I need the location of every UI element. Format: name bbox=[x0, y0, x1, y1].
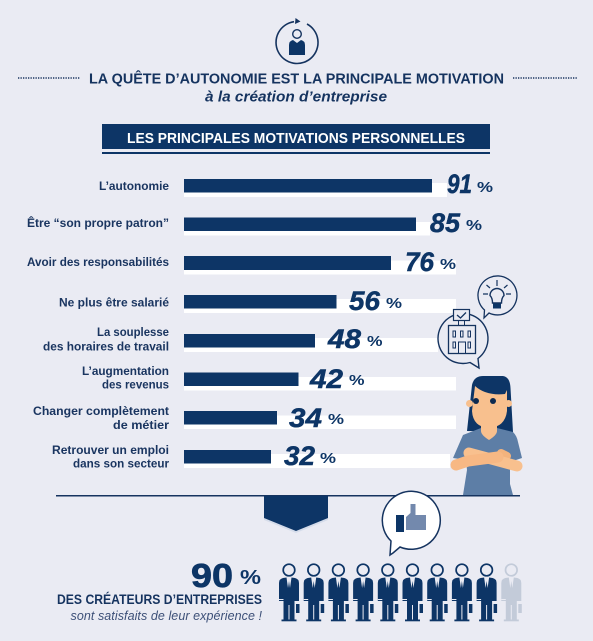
row: secteur bbox=[52, 441, 450, 471]
heading banner bbox=[102, 124, 490, 154]
row: salarie: 56 bbox=[349, 286, 380, 316]
row: metier: de métier bbox=[113, 420, 170, 432]
row: salarie bbox=[59, 286, 456, 316]
row: revenus: des revenus bbox=[102, 380, 169, 392]
title: à la création d’entreprise bbox=[205, 90, 387, 106]
row: revenus: 42 bbox=[309, 364, 343, 394]
row: metier bbox=[33, 403, 456, 433]
row: responsabilites: Avoir des responsabilités bbox=[27, 257, 169, 269]
icon: person in a circular arrow bbox=[276, 18, 318, 63]
heading banner: LES PRINCIPALES MOTIVATIONS PERSONNELLES bbox=[127, 131, 465, 147]
row: patron: Être “son propre patron” bbox=[27, 217, 169, 230]
title: LA QUÊTE D’AUTONOMIE EST LA PRINCIPALE MOTIVATION bbox=[89, 70, 504, 88]
row: metier: Changer complètement bbox=[33, 406, 169, 418]
row: souplesse bbox=[43, 324, 438, 354]
icon: building speech bubble bbox=[438, 310, 488, 368]
statistic: 90 %: DES CRÉATEURS D’ENTREPRISES bbox=[57, 592, 262, 607]
row: patron bbox=[27, 208, 482, 238]
row: salarie: Ne plus être salarié bbox=[59, 298, 169, 310]
icon: thumbs-up speech bubble bbox=[382, 491, 440, 555]
pictogram row: ten business people bbox=[279, 564, 522, 621]
statistic: 90 %: sont satisfaits de leur expérience ! bbox=[70, 609, 263, 623]
illustration: woman with crossed arms bbox=[453, 376, 522, 495]
icon: light bulb speech bubble bbox=[478, 276, 517, 318]
row: autonomie: 91 bbox=[447, 169, 472, 199]
row: metier: 34 bbox=[289, 403, 322, 433]
row: souplesse: La souplesse bbox=[97, 327, 169, 339]
row: salarie: % bbox=[386, 295, 402, 312]
row: responsabilites bbox=[27, 247, 456, 277]
row: autonomie: % bbox=[477, 179, 493, 196]
statistic: 90 % bbox=[57, 557, 263, 623]
row: autonomie bbox=[99, 169, 493, 199]
row: secteur: % bbox=[320, 450, 336, 467]
row: responsabilites: % bbox=[440, 256, 456, 273]
row: patron: 85 bbox=[430, 208, 461, 238]
row: secteur: 32 bbox=[284, 441, 315, 471]
row: responsabilites: 76 bbox=[405, 247, 434, 277]
row: patron: % bbox=[466, 217, 482, 234]
title bbox=[89, 70, 504, 106]
row: secteur: Retrouver un emploi bbox=[52, 445, 169, 457]
row: revenus: L’augmentation bbox=[82, 366, 169, 378]
row: revenus: % bbox=[349, 372, 364, 389]
row: revenus bbox=[82, 364, 456, 394]
bar chart bbox=[27, 169, 493, 471]
row: autonomie: L’autonomie bbox=[99, 181, 169, 193]
divider with arrow tab bbox=[56, 495, 520, 533]
row: souplesse: 48 bbox=[327, 324, 361, 354]
row: metier: % bbox=[328, 411, 344, 428]
row: souplesse: % bbox=[367, 333, 382, 350]
statistic: 90 %: 90 bbox=[191, 557, 233, 594]
row: secteur: dans son secteur bbox=[73, 458, 170, 470]
row: souplesse: des horaires de travail bbox=[43, 342, 169, 354]
statistic: 90 %: % bbox=[240, 567, 261, 589]
